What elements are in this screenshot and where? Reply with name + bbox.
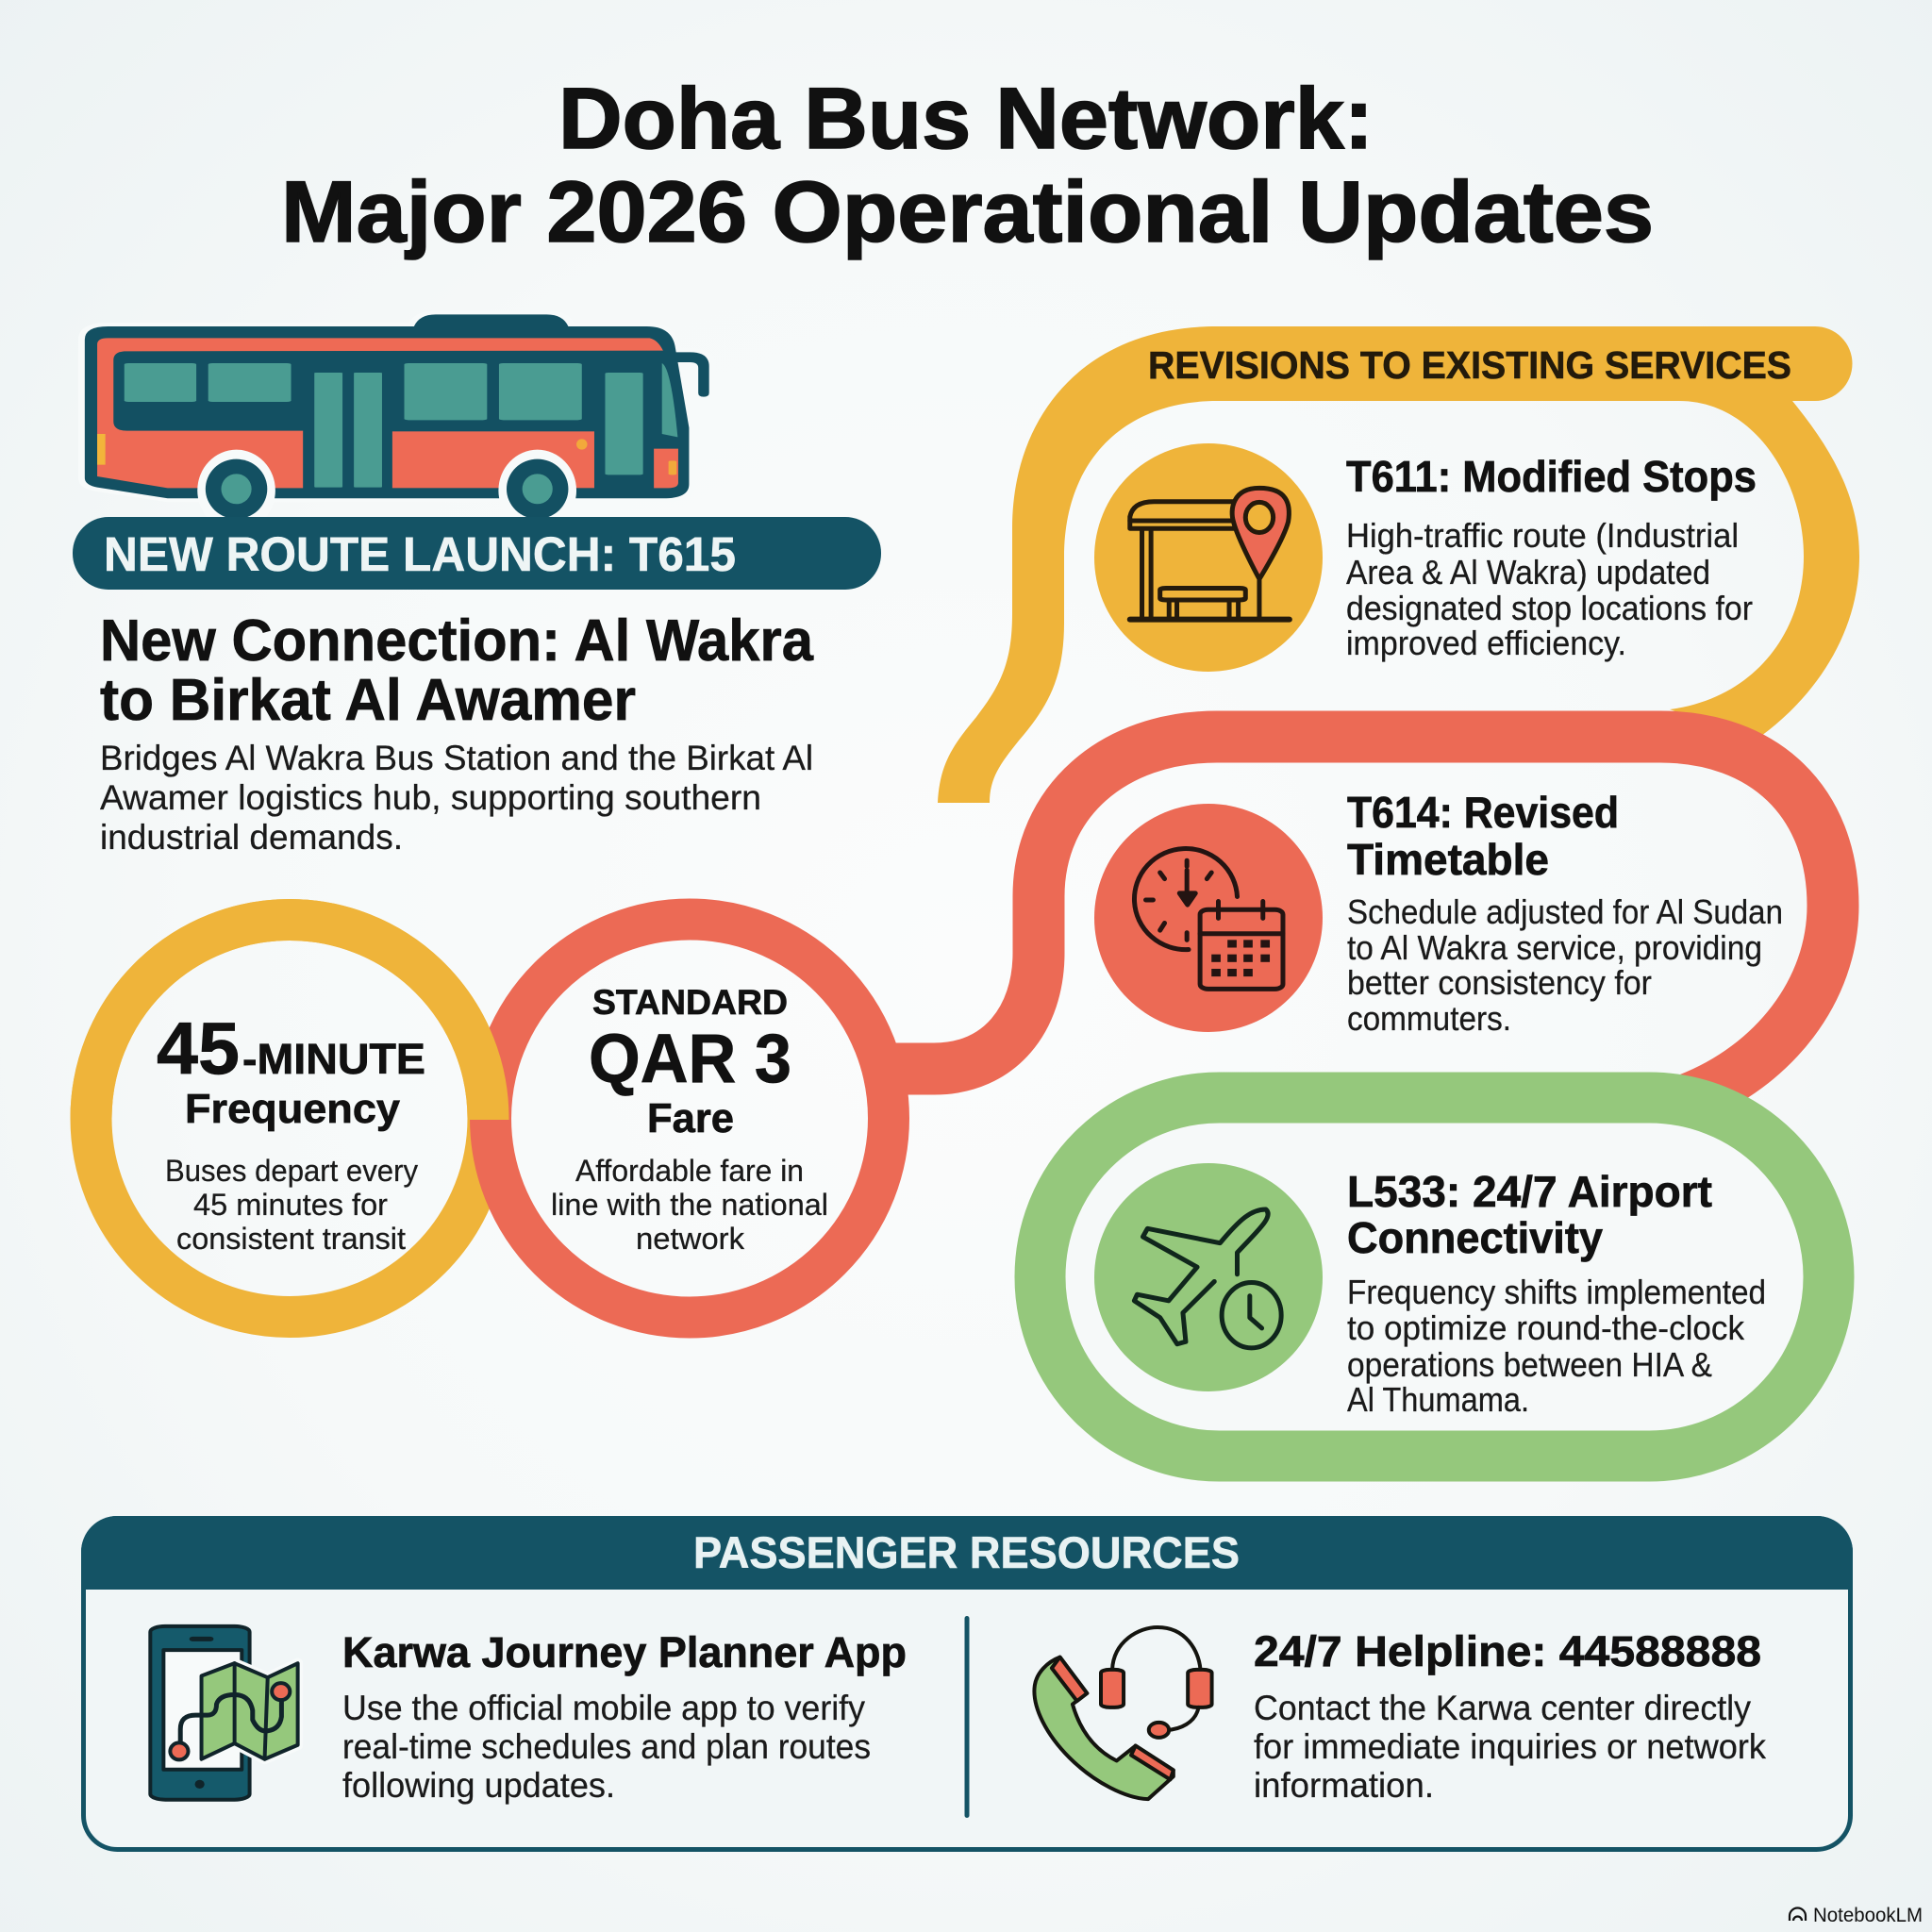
text block: frequency: Buses depart every [165,1154,418,1188]
text block: T614 [1347,788,1783,1038]
divider [964,1616,970,1818]
text block: fare: Affordable fare in [575,1154,804,1188]
connector: red route band [887,737,1833,1099]
text block: new connection [100,608,813,857]
text block: T611: designated stop locations for [1346,589,1753,627]
text block: helpline: for immediate inquiries or network [1254,1727,1766,1766]
panel heading: PASSENGER RESOURCES [693,1527,1240,1577]
text block: L533: to optimize round-the-clock [1347,1308,1745,1347]
text block: fare: Fare [647,1095,734,1141]
ring: fare [491,919,889,1317]
text block: frequency: -MINUTE [242,1035,425,1083]
icon: bus [78,310,716,531]
text block: fare: line with the national [551,1188,828,1222]
text block: T614: better consistency for [1347,963,1652,1002]
text block: helpline [1254,1627,1766,1805]
text block: L533: L533: 24/7 Airport [1347,1167,1712,1216]
text block: frequency: 45 minutes for [193,1188,388,1222]
text block: L533: Al Thumama. [1347,1380,1529,1419]
text block: fare: QAR 3 [589,1021,791,1097]
text block: T614: commuters. [1347,999,1511,1038]
text block: T614: T614: Revised [1347,788,1619,837]
text block: Karwa app: real-time schedules and plan routes [342,1727,871,1766]
icon: clock and calendar [1094,804,1323,1032]
text block: L533: Connectivity [1347,1213,1603,1262]
text block: L533 [1347,1167,1766,1419]
icon: phone with map [150,1626,298,1800]
heading: new route launch pill [73,517,881,590]
text block: new connection: Awamer logistics hub, supporting southern [100,778,761,817]
text block: helpline: information. [1254,1766,1434,1805]
text block: fare: STANDARD [592,983,788,1022]
text block: Karwa app: Use the official mobile app to verify [342,1689,865,1727]
text block: T614: Timetable [1347,835,1549,884]
icon: bus stop with location pin [1094,443,1323,672]
text block: new connection: Bridges Al Wakra Bus Station and the Birkat Al [100,739,813,777]
ring: frequency [91,920,489,1317]
text block: T611: High-traffic route (Industrial [1346,516,1739,555]
text block: T611: T611: Modified Stops [1346,452,1757,501]
text block: frequency: consistent transit [176,1222,406,1256]
panel header [81,1516,1853,1590]
text block: L533: Frequency shifts implemented [1347,1273,1766,1311]
text block: T614: to Al Wakra service, providing [1347,928,1762,967]
panel: passenger resources [81,1516,1853,1849]
logo: NotebookLM: NotebookLM [1813,1905,1923,1926]
icon: airplane and clock [1094,1163,1323,1391]
text block: new connection: industrial demands. [100,818,403,857]
text block: L533: operations between HIA & [1347,1345,1712,1384]
text block: T611: Area & Al Wakra) updated [1346,553,1710,591]
text block: T611: improved efficiency. [1346,624,1626,662]
text block: Karwa app [342,1628,907,1805]
title: Doha Bus Network: [558,71,1374,167]
text block: frequency: Frequency [185,1086,401,1132]
text block: Karwa app: Karwa Journey Planner App [342,1628,907,1676]
text block: helpline: 24/7 Helpline: 44588888 [1254,1627,1761,1675]
text block: frequency: 45 [157,1007,240,1090]
title [281,71,1654,260]
text block: Karwa app: following updates. [342,1766,615,1805]
text block: T614: Schedule adjusted for Al Sudan [1347,892,1783,931]
text block: new connection: New Connection: Al Wakra [100,608,813,674]
panel outline: green pill [1040,1098,1828,1457]
connector: yellow route band [938,326,1859,803]
text block: T611 [1346,452,1757,662]
heading: new route launch pill: NEW ROUTE LAUNCH: T615 [104,527,736,581]
text block: new connection: to Birkat Al Awamer [100,668,636,733]
icon: telephone and headset [1034,1627,1212,1799]
ring overlap: yellow over red [70,899,509,1120]
text block: fare [551,983,828,1256]
text block: helpline: Contact the Karwa center directly [1254,1689,1751,1727]
title: Major 2026 Operational Updates [281,164,1654,260]
text block: fare: network [636,1222,745,1256]
text block: frequency [157,1007,425,1256]
heading: revisions: REVISIONS TO EXISTING SERVICES [1148,343,1791,387]
